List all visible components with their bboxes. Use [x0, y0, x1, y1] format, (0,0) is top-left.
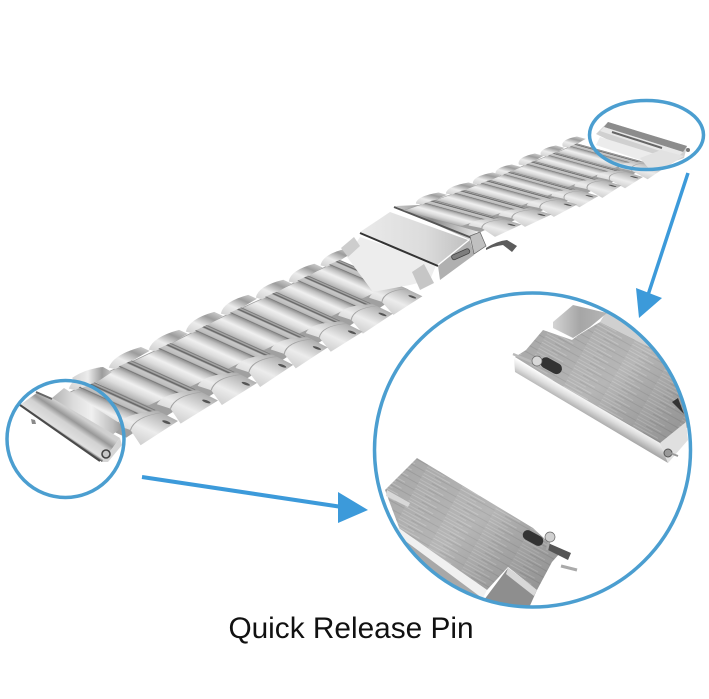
magnified circle	[374, 293, 690, 612]
caption: Quick Release Pin	[228, 612, 474, 645]
magnified lower link	[385, 458, 577, 612]
watch band: end link with pin, left	[20, 367, 124, 462]
arrow: to magnified view from right	[636, 173, 688, 318]
watch band: right section	[389, 136, 681, 237]
arrow: to magnified view from left	[142, 477, 368, 523]
magnified upper link	[513, 305, 690, 463]
buckle hook	[486, 240, 517, 252]
illustration: watch band with quick release pin callouts	[5, 98, 706, 644]
pin end	[102, 450, 110, 458]
clasp	[341, 205, 517, 292]
callout ellipse: right pin	[590, 100, 704, 170]
pin end	[686, 148, 690, 152]
watch band: left section	[36, 248, 444, 445]
callout circle: left pin	[7, 380, 124, 498]
watch band: end link with pin, right	[596, 122, 690, 170]
